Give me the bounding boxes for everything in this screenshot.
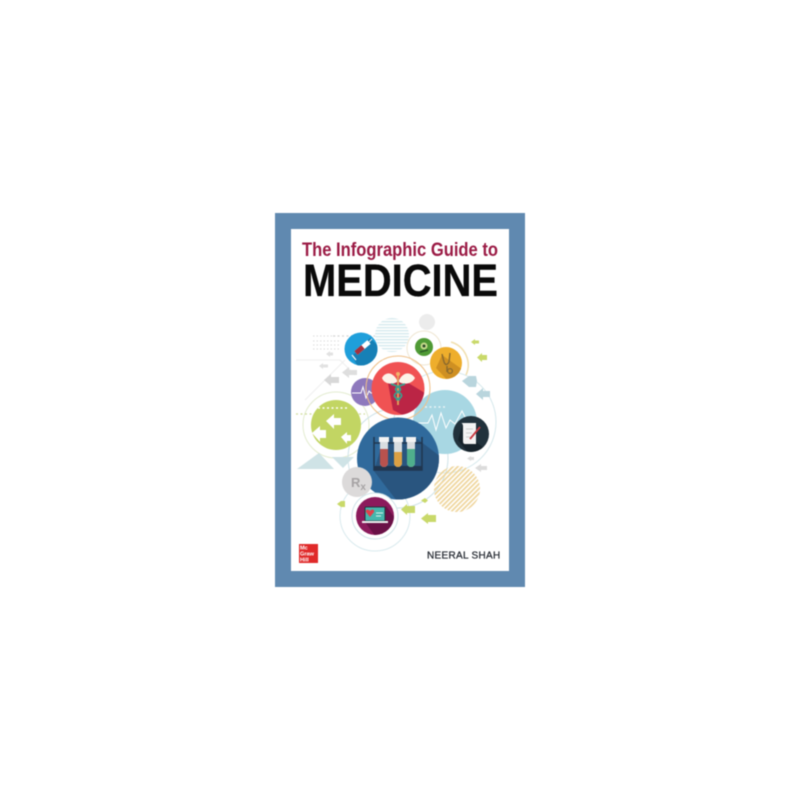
white cover panel <box>291 229 509 571</box>
Rx grey circle: x <box>360 482 366 493</box>
grey arrows <box>319 351 357 386</box>
purple ECG circle <box>351 378 379 406</box>
McGraw-Hill logo: Hill <box>300 558 309 564</box>
background decorations <box>296 314 496 551</box>
lime arrows circle <box>311 400 361 450</box>
syringe icon circle <box>344 332 378 366</box>
stethoscope orange circle <box>429 346 463 380</box>
laptop heart magenta circle <box>352 493 400 540</box>
author name: NEERAL SHAH <box>427 550 501 562</box>
blue-grey arrows right <box>462 376 490 472</box>
green arrows <box>337 339 487 524</box>
McGraw-Hill logo <box>299 544 318 564</box>
title line: MEDICINE: MEDICINE <box>303 255 498 306</box>
book cover infographic <box>274 212 526 588</box>
blue cover border <box>275 213 525 587</box>
test tubes dark blue circle <box>357 418 445 505</box>
McGraw-Hill logo: Graw <box>300 552 315 558</box>
triangles <box>297 453 354 469</box>
title line: The Infographic Guide to: The Infographic Guide to <box>302 240 498 261</box>
light blue ECG circle <box>413 390 477 454</box>
Rx grey circle: R <box>351 475 360 490</box>
hatched yellow circle <box>434 466 480 512</box>
McGraw-Hill logo: Mc <box>300 546 308 552</box>
prescription dark circle <box>453 416 489 455</box>
Rx grey circle <box>342 467 372 497</box>
caduceus red circle <box>366 356 430 420</box>
small green virus circle <box>415 338 433 356</box>
